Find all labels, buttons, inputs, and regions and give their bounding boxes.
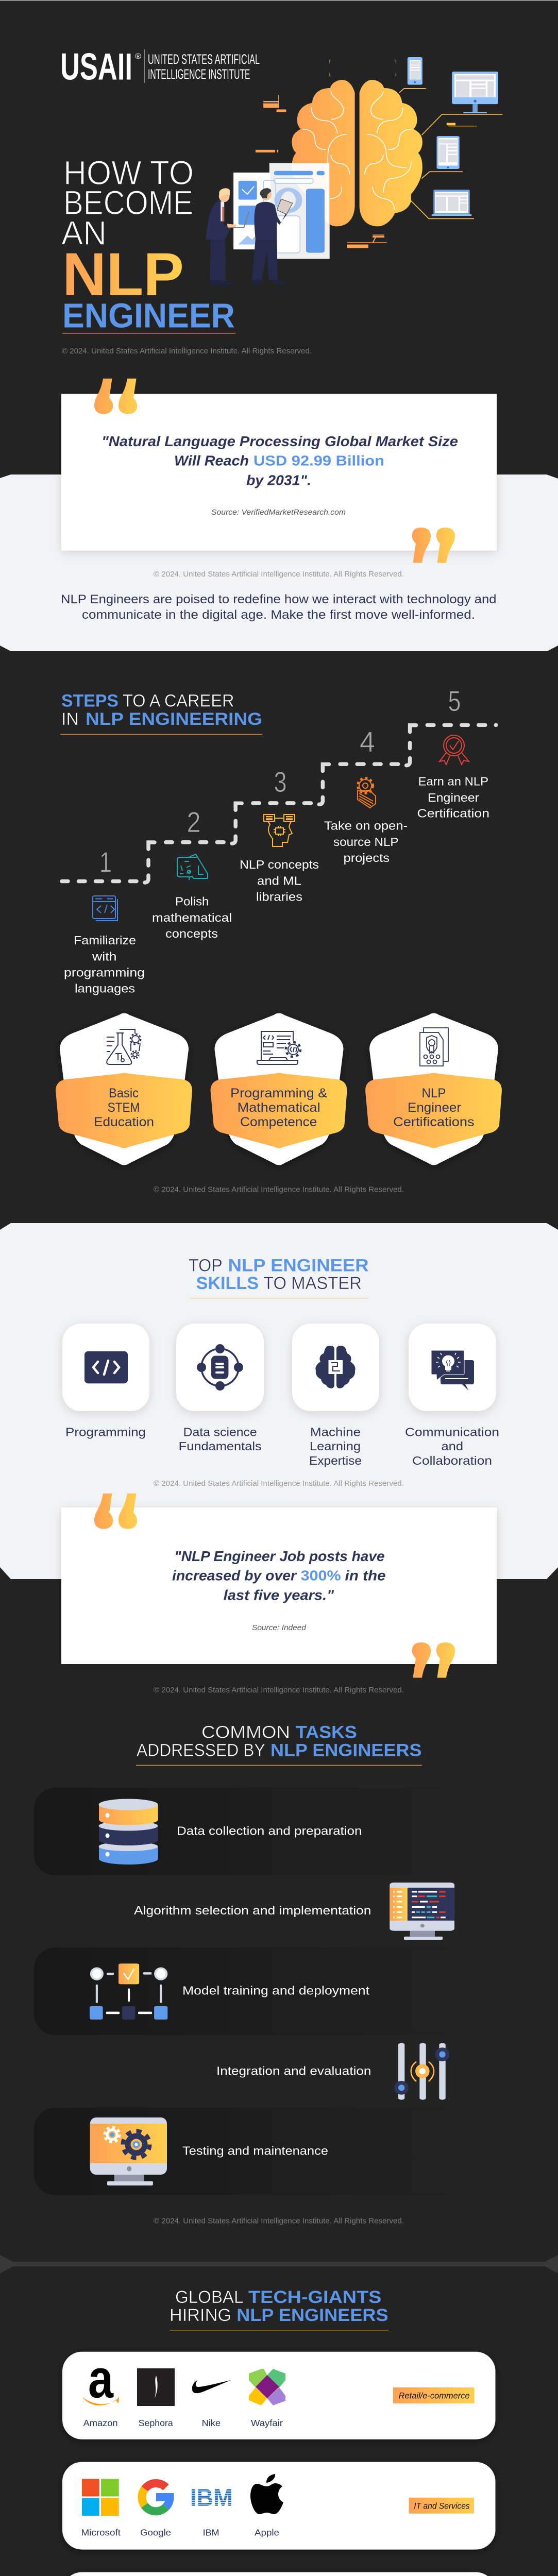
tag: IT and Services [414,2501,470,2511]
icon: desktop monitor [452,72,498,113]
step 3: 3 [274,766,286,798]
people: left businessman [206,188,249,285]
tag [393,2387,475,2403]
company names: Microsoft [81,2527,121,2537]
source: Source: Indeed [252,1623,307,1632]
quote text: USD 92.99 Billion [253,452,384,469]
card label [393,1086,475,1129]
heading: global tech giants [170,2287,388,2331]
heading: steps to a career [60,691,262,735]
step 2 label: mathematical [152,911,232,924]
quote text: "Natural Language Processing Global Market Size [102,433,458,449]
logo: USAII: INTELLIGENCE INSTITUTE [148,66,250,82]
label [309,1425,362,1467]
logo: Microsoft [82,2479,119,2516]
card label [230,1086,328,1129]
card label: Competence [240,1115,317,1129]
skill card: programming [62,1324,149,1438]
company card: retail and e-commerce [62,2348,496,2439]
heading: steps to a career: IN [61,709,79,729]
banner [365,1073,502,1148]
step 1 label: programming [64,966,145,979]
quote text: increased by over [172,1568,297,1584]
step 1 [64,846,145,995]
step 5 label: Earn an NLP [418,775,488,788]
title: How to become an NLP Engineer: HOW TO [63,154,194,192]
label: Learning [310,1439,361,1453]
copyright: © 2024. United States Artificial Intelligence Institute. All Rights Reserved. [154,1186,404,1194]
task row: algorithm selection and implementation: Algorithm selection and implementation [134,1904,371,1917]
step 2 label: Polish [175,895,209,908]
quote text: 300% [301,1568,341,1584]
logo: Nike [192,2380,231,2393]
panel: job posts quote [61,1494,497,1677]
hexagon card: NLP Engineer Certifications [365,1013,502,1165]
logo: Apple [250,2474,283,2514]
icon: closing quote mark [412,528,455,563]
logo: USAII: USAII [60,46,132,88]
task panel: testing and maintenance [34,2108,558,2195]
icon: brain [292,80,422,226]
copyright: © 2024. United States Artificial Intelligence Institute. All Rights Reserved. [154,2217,404,2226]
title: How to become an NLP Engineer: AN [61,214,107,252]
task row: algorithm selection and implementation [134,1883,454,1940]
heading: top NLP engineer skills: TO MASTER [263,1274,362,1293]
icon: certified badge [439,735,469,765]
label: Data science [183,1425,257,1438]
label: Data collection and preparation [177,1824,362,1837]
company names: Nike [202,2418,221,2428]
intro paragraph: communicate in the digital age. Make the first move well-informed. [82,608,475,622]
company card: IT and services [62,2462,496,2550]
icon: code window [93,896,117,921]
icon: tablet [436,136,460,169]
icon: idea speech bubbles [431,1350,474,1391]
label: Communication [405,1425,499,1438]
label: Machine [310,1425,361,1438]
logo: Wayfair [249,2369,285,2405]
logo: USAII: UNITED STATES ARTIFICIAL [148,52,260,67]
icon: data orbit [197,1344,243,1391]
icon: laptop [432,190,471,216]
label: Fundamentals [179,1439,262,1453]
label [179,1425,262,1453]
icon: math tablet [177,854,208,880]
heading: global tech giants: GLOBAL [175,2287,243,2307]
quote text: last five years." [224,1587,334,1603]
tag [409,2498,474,2514]
step 1 label [64,934,145,995]
company names [81,2527,279,2537]
title: How to become an NLP Engineer [61,154,235,335]
card label: Certifications [393,1115,475,1129]
title: How to become an NLP Engineer: NLP [62,241,184,309]
quote text [102,433,458,488]
copyright: © 2024. United States Artificial Intelligence Institute. All Rights Reserved. [154,1480,404,1488]
heading: top NLP engineer skills [189,1256,369,1299]
step 5 [417,685,489,820]
card label: Programming & [230,1086,328,1100]
label: Collaboration [412,1454,492,1467]
quote text [172,1548,386,1603]
heading: top NLP engineer skills: NLP ENGINEER [228,1256,369,1275]
quote text: Will Reach [174,452,249,469]
step 4 label [324,819,408,865]
copyright: © 2024. United States Artificial Intelligence Institute. All Rights Reserved. [154,570,404,579]
quote text: by 2031". [246,472,311,488]
step 1 label: Familiarize [74,934,136,947]
heading: steps to a career: STEPS [61,691,119,710]
label [405,1425,499,1467]
icon: head with chip [264,815,295,846]
skill card: data science fundamentals [176,1324,264,1453]
step 4 label: source NLP [333,835,399,849]
step 3 [240,766,319,903]
step 3 label [240,858,319,903]
heading: common tasks: NLP ENGINEERS [270,1741,421,1760]
company names: Wayfair [251,2418,283,2428]
company names: Apple [255,2527,279,2537]
heading: steps to a career: NLP ENGINEERING [86,709,262,729]
card label: Engineer [408,1100,461,1115]
step 4 [324,725,408,865]
label: Programming [65,1425,146,1438]
stairway dashed path [62,725,496,883]
company names: IBM [203,2527,219,2537]
step 1 label: with [92,950,116,963]
icon: phone [408,57,422,85]
label: and [441,1439,463,1453]
icon: database [99,1799,158,1865]
step 1: 1 [99,846,112,878]
card label [94,1086,154,1129]
step 3 label: libraries [256,890,302,903]
heading: global tech giants: NLP ENGINEERS [236,2306,388,2325]
label: Expertise [309,1454,362,1467]
task row: integration and evaluation [216,2043,449,2100]
skill card: machine learning expertise [292,1324,379,1467]
logo: USAII [60,46,260,88]
tag: Retail/e-commerce [399,2391,470,2400]
step 4: 4 [360,725,375,758]
heading: common tasks [136,1723,422,1766]
light section: market size [0,474,558,651]
intro paragraph [61,592,497,622]
heading: common tasks: TASKS [296,1723,357,1742]
step 5 label: Engineer [428,791,479,804]
hexagon card: Programming & Mathematical Competence [210,1013,347,1165]
heading: steps to a career: TO A CAREER [123,691,234,710]
copyright: © 2024. United States Artificial Intelligence Institute. All Rights Reserved. [62,347,312,355]
step 5 label: Certification [417,807,489,820]
icon: laptop with gear [257,1031,300,1064]
task panel: model training and deployment [34,1947,558,2035]
step 5: 5 [448,685,461,717]
label: Testing and maintenance [182,2144,328,2158]
step 1 label: languages [75,981,135,995]
skill card: communication and collaboration [405,1324,499,1467]
company names [83,2418,283,2428]
step 5 label [417,775,489,820]
card label: Mathematical [238,1100,320,1115]
card label: STEM [108,1100,140,1115]
analytics panels [233,163,330,259]
icon: circuit brain [315,1346,356,1388]
heading: common tasks: ADDRESSED BY [137,1741,265,1760]
logo: Sephora [137,2368,175,2406]
card label: Basic [109,1086,139,1100]
step 4 label: Take on open- [324,819,408,833]
banner [56,1073,192,1148]
hexagon card: Basic STEM Education [56,1013,192,1165]
title: How to become an NLP Engineer: ENGINEER [62,297,235,335]
copyright: © 2024. United States Artificial Intelligence Institute. All Rights Reserved. [154,1686,404,1694]
icon: workflow diagram [90,1963,167,2020]
quote text: in the [345,1568,386,1584]
logo: IBM: IBM [190,2484,233,2511]
step 2: 2 [187,806,201,838]
title: How to become an NLP Engineer: BECOME [63,183,193,222]
logo: Google [142,2483,170,2511]
icon: code block [84,1351,128,1383]
heading: top NLP engineer skills: SKILLS [196,1274,259,1293]
step 3 label: and ML [257,874,301,887]
icon: maintenance monitor [90,2117,167,2185]
quote text: "NLP Engineer Job posts have [174,1548,385,1564]
company names: Google [140,2527,171,2537]
heading: common tasks: COMMON [201,1723,290,1742]
heading: global tech giants: TECH-GIANTS [248,2287,381,2307]
icon: code monitor [390,1883,454,1940]
people: right businessman [252,188,293,284]
icon: certificate [420,1028,448,1066]
step 2 label: concepts [165,927,218,940]
step 4 label: projects [343,851,390,865]
icon: closing quote mark [412,1642,455,1677]
connector lines [399,89,502,218]
decorative orange data marks [256,60,477,248]
icon: gear and document [358,778,376,808]
light section: skills [0,1223,558,1579]
source: Source: VerifiedMarketResearch.com [211,508,346,517]
card label: Education [94,1115,154,1129]
step 2 [152,806,232,940]
heading: global tech giants: HIRING [170,2306,231,2325]
intro paragraph: NLP Engineers are poised to redefine how we interact with technology and [61,592,497,606]
task panel: data collection and preparation [34,1788,558,1875]
icon: sliders [394,2043,449,2100]
task row: integration and evaluation: Integration and evaluation [216,2064,371,2077]
icon: flask [107,1029,141,1064]
panel: market size quote [61,379,497,563]
logo: Amazon: a [88,2348,114,2409]
company card: entertainment and social media [62,2572,496,2576]
label: Model training and deployment [182,1984,370,1997]
step 3 label: NLP concepts [240,858,319,871]
banner [210,1073,347,1148]
heading: top NLP engineer skills: TOP [189,1256,223,1275]
logo: USAII: ® [135,52,141,61]
icon: opening quote mark [94,1494,137,1529]
step 2 label [152,895,232,940]
company names: Sephora [139,2418,173,2428]
card label: NLP [421,1086,446,1100]
company names: Amazon [83,2418,118,2428]
icon: opening quote mark [94,379,137,414]
hero illustration: brain, devices and business people [206,57,502,285]
